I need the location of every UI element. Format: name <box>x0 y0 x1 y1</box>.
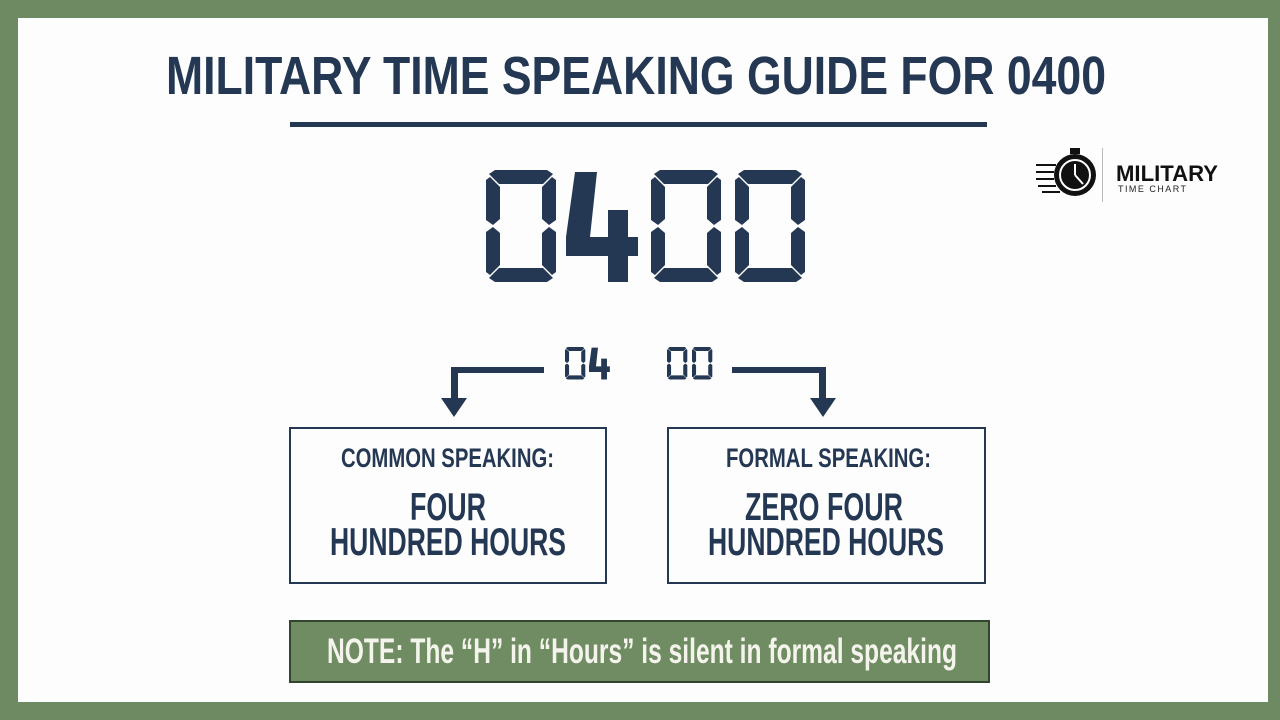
title: MILITARY TIME SPEAKING GUIDE FOR 0400 <box>166 46 1106 106</box>
callout: note: NOTE: The “H” in “Hours” is silent in formal speaking <box>327 632 957 671</box>
panel: common speaking: HUNDRED HOURS <box>330 521 566 564</box>
small digits 04 <box>565 347 610 379</box>
logo: MILITARY <box>1116 161 1218 186</box>
arrow: left <box>441 367 544 417</box>
callout: note <box>290 621 989 682</box>
big digital time 0400 <box>486 170 805 282</box>
panel: common speaking: FOUR <box>410 486 486 529</box>
title underline <box>290 122 987 127</box>
panel: formal speaking: HUNDRED HOURS <box>708 521 944 564</box>
logo: TIME CHART <box>1118 184 1186 194</box>
panel: common speaking <box>290 428 606 583</box>
panel: formal speaking: ZERO FOUR <box>745 486 903 529</box>
panel: common speaking: COMMON SPEAKING: <box>341 443 554 473</box>
logo <box>1036 148 1218 202</box>
small digits 00 <box>667 347 712 379</box>
panel: formal speaking: FORMAL SPEAKING: <box>726 443 931 473</box>
arrow: right <box>732 367 836 417</box>
panel: formal speaking <box>668 428 985 583</box>
